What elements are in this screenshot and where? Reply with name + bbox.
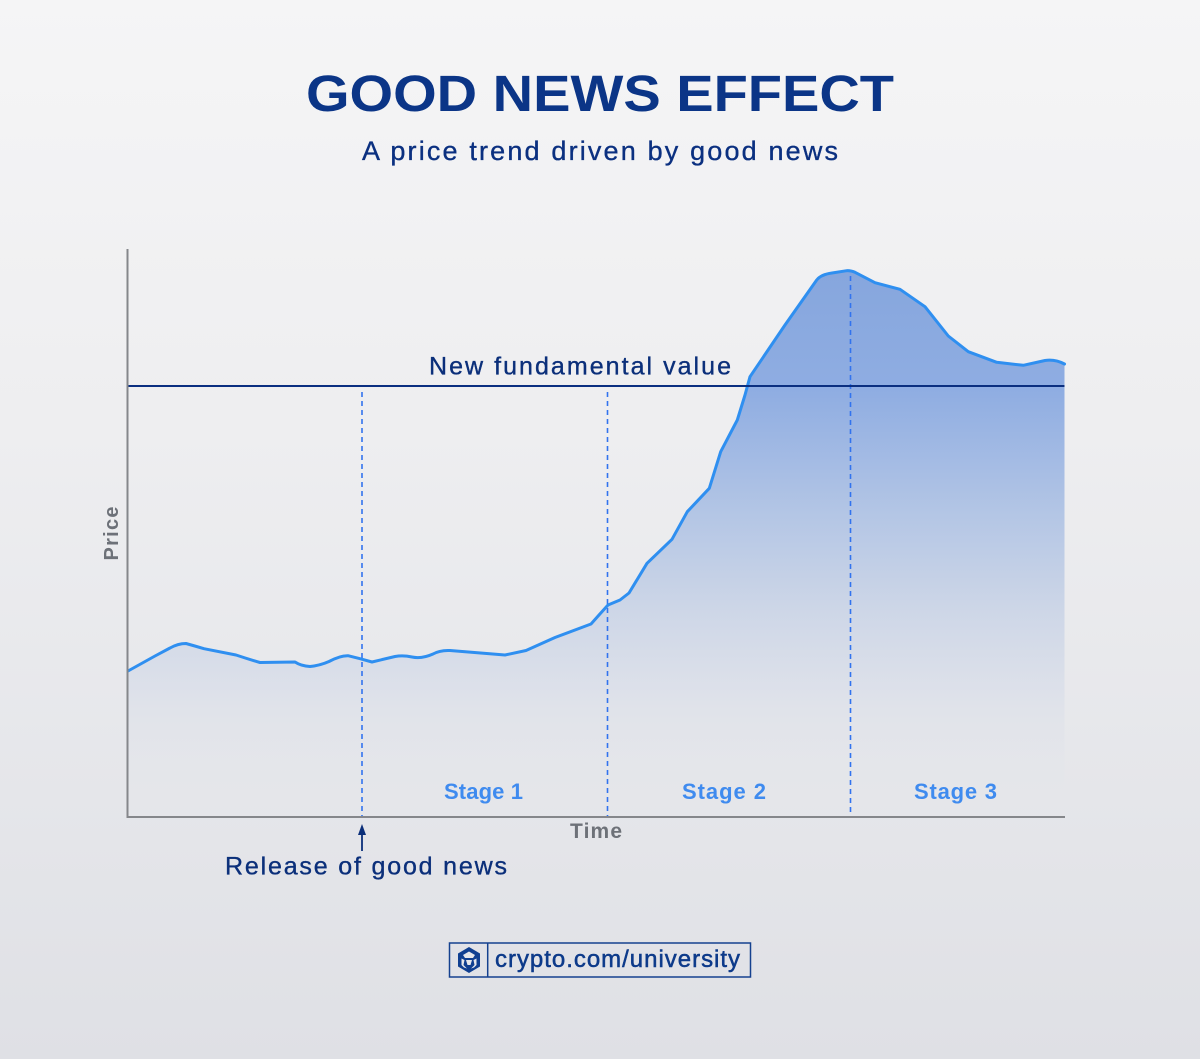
chart: price trend xyxy=(101,249,1065,880)
stage divider: stage 1 to 2 xyxy=(606,392,608,817)
icon: crypto.com logo xyxy=(458,947,480,973)
stage 3 label: Stage 3 xyxy=(914,779,997,804)
stage 1 label: Stage 1 xyxy=(444,779,523,804)
fundamental value line xyxy=(127,385,1064,387)
arrow: release marker xyxy=(358,824,366,851)
footer badge xyxy=(450,943,750,977)
axes xyxy=(128,249,1065,817)
y axis label: Price xyxy=(101,506,123,560)
badge outline xyxy=(450,943,750,977)
stage divider: stage 2 to 3 xyxy=(850,276,852,817)
release of good news label: Release of good news xyxy=(225,852,507,880)
stage divider: release of good news xyxy=(361,392,363,817)
price line xyxy=(128,271,1064,671)
subtitle: A price trend driven by good news xyxy=(362,136,838,166)
title: GOOD NEWS EFFECT xyxy=(306,65,894,122)
area under price curve xyxy=(128,271,1064,817)
badge url: crypto.com/university xyxy=(495,946,740,973)
x axis label: Time xyxy=(570,820,622,843)
badge divider xyxy=(487,943,489,977)
stage 2 label: Stage 2 xyxy=(682,779,766,804)
new fundamental value label: New fundamental value xyxy=(429,352,731,380)
